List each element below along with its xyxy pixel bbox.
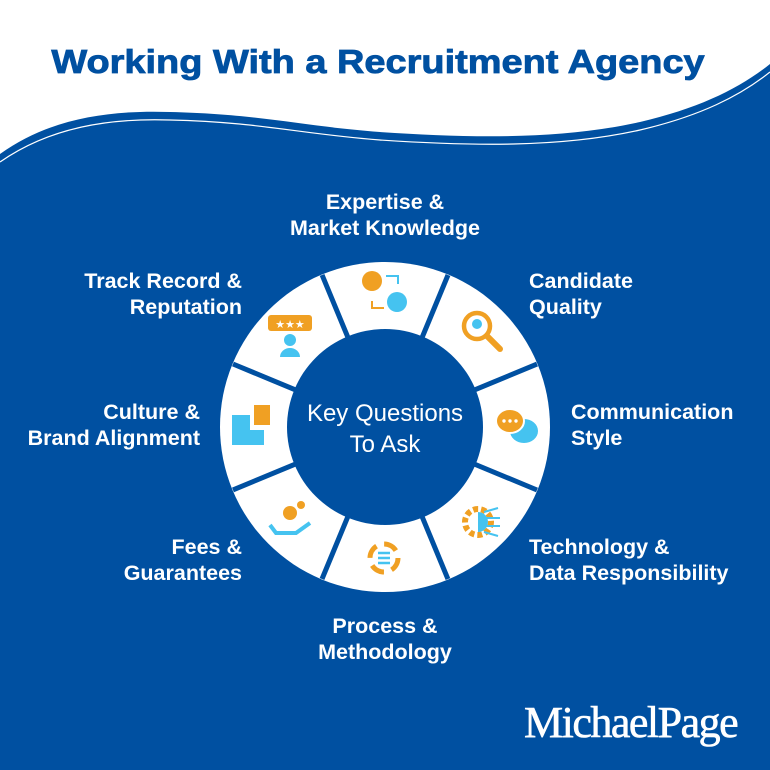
label: candidate quality: Quality <box>529 295 602 319</box>
label: candidate quality <box>529 269 633 319</box>
icon: rating <box>268 315 312 357</box>
label: culture: Brand Alignment <box>28 426 200 450</box>
label: process: Process & <box>332 614 438 638</box>
icon: puzzle <box>232 405 270 445</box>
label: expertise: Expertise & <box>326 190 444 214</box>
label: culture: Culture & <box>103 400 200 424</box>
label: technology: Technology & <box>529 535 670 559</box>
label: process: Methodology <box>318 640 452 664</box>
icon: gear tech <box>465 508 500 536</box>
icon: cycle <box>370 544 398 572</box>
center text <box>307 400 463 458</box>
label: technology: Data Responsibility <box>529 561 729 585</box>
label: communication: Communication <box>571 400 733 424</box>
label: expertise: Market Knowledge <box>290 216 480 240</box>
icon: hand coin <box>270 501 310 533</box>
center text: To Ask <box>350 431 420 458</box>
title: Working With a Recruitment Agency <box>51 43 705 80</box>
label: track record <box>84 269 242 319</box>
label: fees <box>124 535 242 585</box>
label: track record: Reputation <box>130 295 242 319</box>
label: fees: Guarantees <box>124 561 242 585</box>
icon: heads <box>362 271 407 312</box>
logo: MichaelPage <box>524 698 737 747</box>
icon: speech <box>496 409 538 443</box>
label: communication: Style <box>571 426 622 450</box>
label: communication <box>571 400 733 450</box>
label: track record: Track Record & <box>84 269 242 293</box>
label: process <box>318 614 452 664</box>
label: technology <box>529 535 729 585</box>
icon: magnifier <box>464 313 500 349</box>
center text: Key Questions <box>307 400 463 427</box>
label: expertise <box>290 190 480 240</box>
label: fees: Fees & <box>171 535 242 559</box>
label: culture <box>28 400 200 450</box>
label: candidate quality: Candidate <box>529 269 633 293</box>
icon: rating: ★★★ <box>275 319 305 331</box>
